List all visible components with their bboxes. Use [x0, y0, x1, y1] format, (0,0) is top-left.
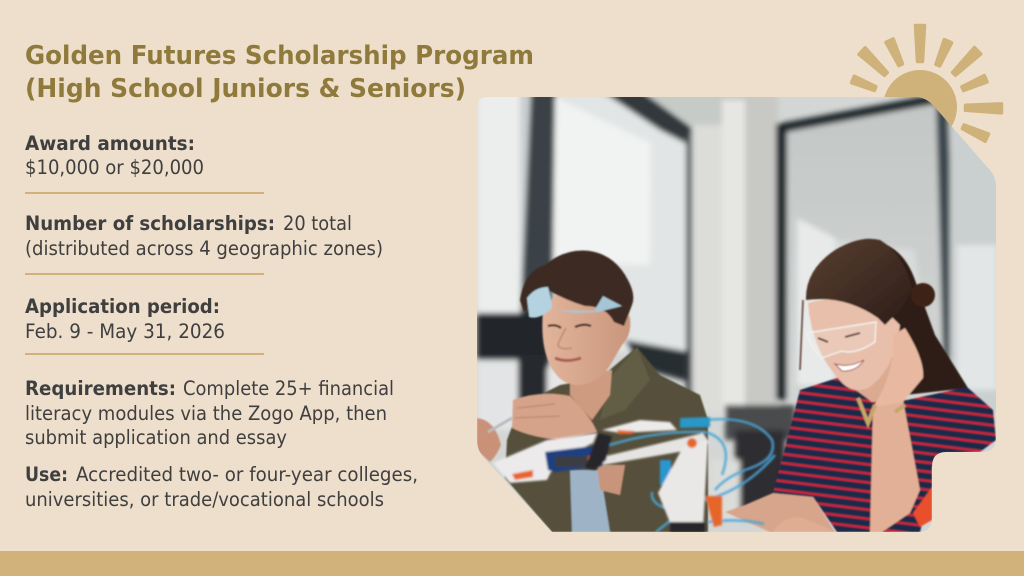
text block: number of scholarships: Number of scholarships: [25, 212, 275, 235]
text block: award amounts [25, 132, 204, 179]
text block: application period [25, 295, 225, 343]
text block: use: Use: [25, 463, 68, 486]
shirt [505, 347, 708, 532]
goggles [527, 287, 622, 318]
title: (High School Juniors & Seniors) [25, 74, 466, 104]
long hair back [887, 244, 968, 396]
face [808, 298, 900, 390]
text block: application period: Feb. 9 - May 31, 2026 [25, 320, 225, 343]
text block: requirements [25, 377, 394, 449]
glasses [807, 322, 876, 358]
text block: requirements: submit application and essay [25, 426, 287, 449]
text block: use: universities, or trade/vocational schools [25, 488, 384, 511]
head [542, 290, 630, 385]
text block: use: Accredited two- or four-year colleges, [76, 463, 418, 486]
upper arm [602, 420, 677, 433]
hand at the bottom [775, 518, 830, 531]
text block: number of scholarships [25, 212, 383, 260]
figure: girl with safety glasses [725, 239, 996, 532]
left arm [725, 493, 835, 532]
hands [477, 394, 625, 495]
neck [856, 358, 892, 404]
front hair [806, 239, 912, 325]
orange object [913, 487, 932, 527]
photo: two students building a robotic arm [477, 90, 1000, 532]
figure: boy with goggles [477, 251, 708, 532]
text block: number of scholarships: 20 total [283, 212, 352, 235]
post [658, 440, 708, 530]
title [25, 41, 534, 104]
bottom bar [0, 551, 1024, 576]
text block: use [25, 463, 418, 511]
text block: number of scholarships: (distributed across 4 geographic zones) [25, 237, 383, 260]
lower arm [602, 433, 710, 465]
hair [520, 251, 633, 326]
smile [835, 360, 864, 371]
neck [570, 370, 612, 420]
text block: requirements: literacy modules via the Zogo App, then [25, 402, 387, 425]
text block: award amounts: Award amounts: [25, 132, 195, 155]
orange clamp [705, 496, 722, 527]
necklace [858, 398, 905, 423]
hand part [493, 433, 597, 483]
text block: award amounts: $10,000 or $20,000 [25, 156, 204, 179]
eye line [818, 333, 860, 342]
text block: requirements: Complete 25+ financial [183, 377, 394, 400]
robotic arm [493, 417, 775, 532]
tubes [595, 419, 775, 532]
text block: application period: Application period: [25, 295, 220, 318]
eyes, nose and mouth [548, 325, 591, 360]
striped shirt [773, 377, 996, 532]
icon: sun [852, 26, 1002, 144]
title: Golden Futures Scholarship Program [25, 41, 534, 71]
text block: requirements: Requirements: [25, 377, 176, 400]
arm and hand [870, 400, 920, 532]
